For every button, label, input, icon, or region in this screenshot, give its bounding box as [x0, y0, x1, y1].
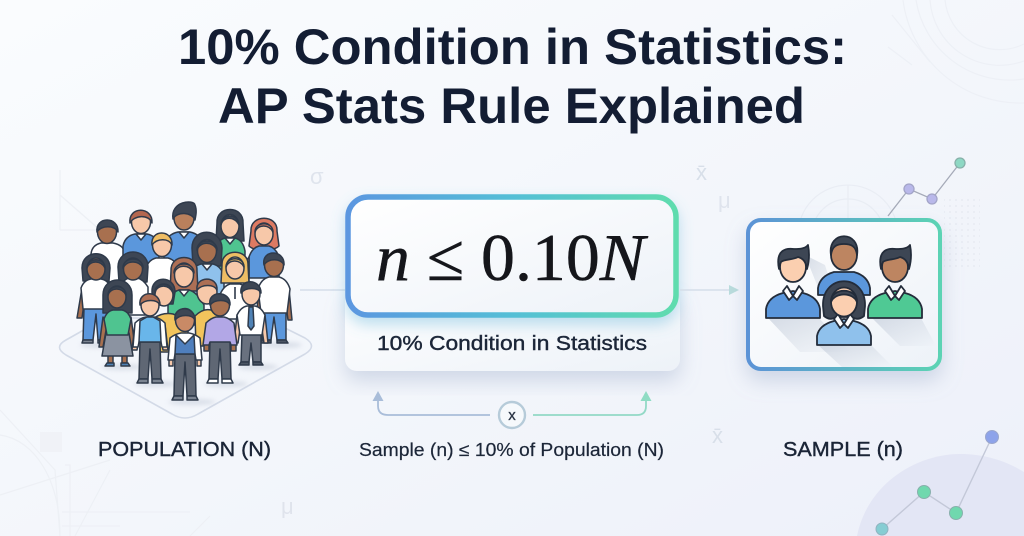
math symbol: sigma: σ	[310, 164, 324, 189]
math symbol: mu top: μ	[718, 188, 731, 213]
right arrow: x to population	[533, 391, 652, 415]
math symbol: x-bar top: x̄	[696, 160, 707, 185]
person: man purple sweater	[203, 294, 237, 383]
sample person: back middle	[818, 236, 870, 295]
sample people	[766, 236, 922, 345]
left arrow: sample to x	[372, 391, 490, 415]
person: woman left blue pants	[77, 254, 113, 343]
connector: population to formula	[300, 289, 345, 291]
person: front woman green skirt	[99, 280, 135, 366]
population label: POPULATION (N)	[98, 438, 271, 461]
platform	[60, 318, 312, 418]
person: man light blue sweater	[132, 294, 168, 383]
relation text: Sample (n) ≤ 10% of Population (N)	[359, 440, 664, 460]
x circle icon: x	[508, 407, 516, 424]
person: man right white shirt	[256, 253, 292, 343]
decorative faint grid, upper left	[60, 170, 105, 230]
title	[178, 19, 847, 134]
person: back woman green	[215, 210, 245, 271]
population group illustration	[60, 202, 312, 418]
person: yellow shirt right	[195, 279, 225, 346]
decorative protractor and dots behind sample card	[798, 185, 980, 270]
person: front man vest	[168, 308, 202, 400]
foot shadows	[80, 342, 302, 405]
line chart: top right	[888, 158, 965, 216]
math symbol: mu bottom: μ	[281, 494, 294, 519]
caption card: 10% condition	[345, 290, 680, 371]
sample card	[748, 220, 940, 369]
sample label: SAMPLE (n)	[783, 438, 903, 461]
sample person: front woman	[817, 281, 871, 345]
decorative concentric arcs, top right	[888, 0, 1024, 103]
person: dark haired woman light blue	[190, 232, 224, 298]
title: 10% Condition in Statistics:	[178, 19, 847, 75]
decorative geometry, bottom left	[0, 410, 210, 536]
person: blonde man	[145, 233, 179, 295]
caption text: 10% Condition in Statistics	[377, 333, 647, 355]
person: yellow shirt left	[152, 279, 188, 352]
title: AP Stats Rule Explained	[218, 78, 805, 134]
cast shadows	[768, 255, 936, 367]
formula card	[348, 197, 676, 315]
x circle icon	[499, 402, 525, 428]
person: woman white blouse	[118, 252, 148, 315]
connector: formula to sample	[680, 285, 739, 295]
blob and line chart: bottom right	[857, 430, 1024, 536]
person: blonde woman	[219, 252, 251, 319]
person: back man blue shirt	[123, 210, 159, 264]
math symbol: x-bar bottom: x̄	[712, 423, 723, 448]
formula: n ≤ 0.10N	[376, 221, 648, 295]
person: back man brown skin	[164, 202, 204, 266]
person: woman brown hair green	[168, 258, 204, 325]
person: back woman red hair	[245, 218, 279, 281]
person: back left man	[91, 220, 125, 282]
sample person: left	[766, 245, 820, 318]
sample person: right	[868, 245, 922, 318]
person: man tie gray pants	[234, 282, 268, 365]
